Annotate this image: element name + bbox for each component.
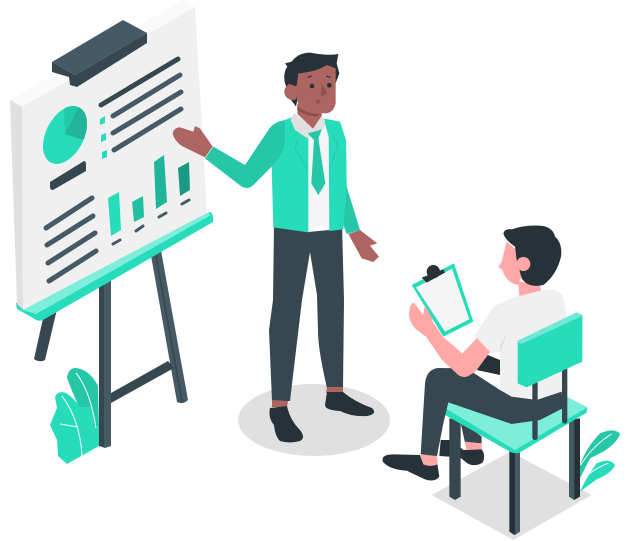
- far sock: [465, 442, 482, 450]
- ear: [516, 257, 530, 271]
- left shoe: [270, 406, 303, 442]
- neck: [518, 282, 541, 296]
- clipboard clip: [422, 265, 445, 283]
- pointing arm: [205, 120, 285, 188]
- hand: [409, 303, 435, 336]
- plant left: [50, 368, 99, 464]
- chart heading bar: [50, 161, 86, 190]
- text lines top right: [101, 59, 181, 150]
- facial features: [308, 76, 332, 104]
- easel rear left leg: [34, 305, 58, 361]
- seated person and chair: [383, 225, 620, 540]
- legs: [269, 223, 344, 401]
- easel right leg: [150, 245, 188, 403]
- easel: flip chart on stand: [10, 0, 213, 464]
- ear: [284, 84, 297, 100]
- near shoe: [383, 454, 439, 481]
- plant right: [580, 430, 620, 492]
- floor shadow: [432, 452, 592, 540]
- hip shadow: [477, 355, 500, 375]
- chair back legs: [449, 418, 580, 500]
- jacket lapel lines: [295, 137, 338, 168]
- arm: [415, 322, 490, 377]
- board front: [22, 7, 207, 310]
- text lines bottom left: [46, 198, 96, 281]
- far shoe: [439, 440, 484, 465]
- front leaf: [50, 392, 99, 464]
- clip on board: [52, 20, 147, 87]
- face: [296, 65, 336, 113]
- pointing hand: [173, 126, 213, 157]
- chair backrest: [518, 312, 582, 387]
- neck: [297, 103, 322, 129]
- right arm: [333, 122, 360, 234]
- clipboard: [412, 263, 473, 337]
- tie: [308, 129, 325, 195]
- legend squares: [100, 116, 107, 159]
- bar chart: [108, 155, 190, 244]
- face: [498, 242, 522, 285]
- board side: [10, 100, 23, 310]
- easel crossbar: [111, 361, 174, 403]
- board edge: [10, 0, 195, 107]
- right hand: [348, 230, 379, 262]
- torso shirt: [474, 289, 566, 402]
- hair: [503, 225, 561, 286]
- presenter: [173, 53, 379, 443]
- chair back posts: [535, 368, 565, 437]
- upper body drawn in zoom coordinates: [173, 53, 379, 262]
- thigh and hip: [421, 368, 563, 456]
- socks: [272, 387, 343, 407]
- shirt: [307, 130, 329, 228]
- tray: [16, 212, 213, 321]
- jacket: [272, 117, 347, 232]
- easel centre leg: [99, 265, 111, 448]
- pie chart: [43, 106, 87, 164]
- shirt fold: [500, 332, 508, 353]
- floor shadow under presenter: [238, 384, 390, 456]
- chair front leg: [509, 450, 520, 535]
- chair seat: [443, 393, 587, 453]
- hair: [284, 53, 339, 107]
- far lower leg: [460, 420, 482, 443]
- collar: [291, 113, 325, 138]
- back leaf: [67, 368, 99, 428]
- chin shadow: [297, 106, 320, 117]
- right shoe: [325, 392, 374, 416]
- near sock: [421, 455, 438, 466]
